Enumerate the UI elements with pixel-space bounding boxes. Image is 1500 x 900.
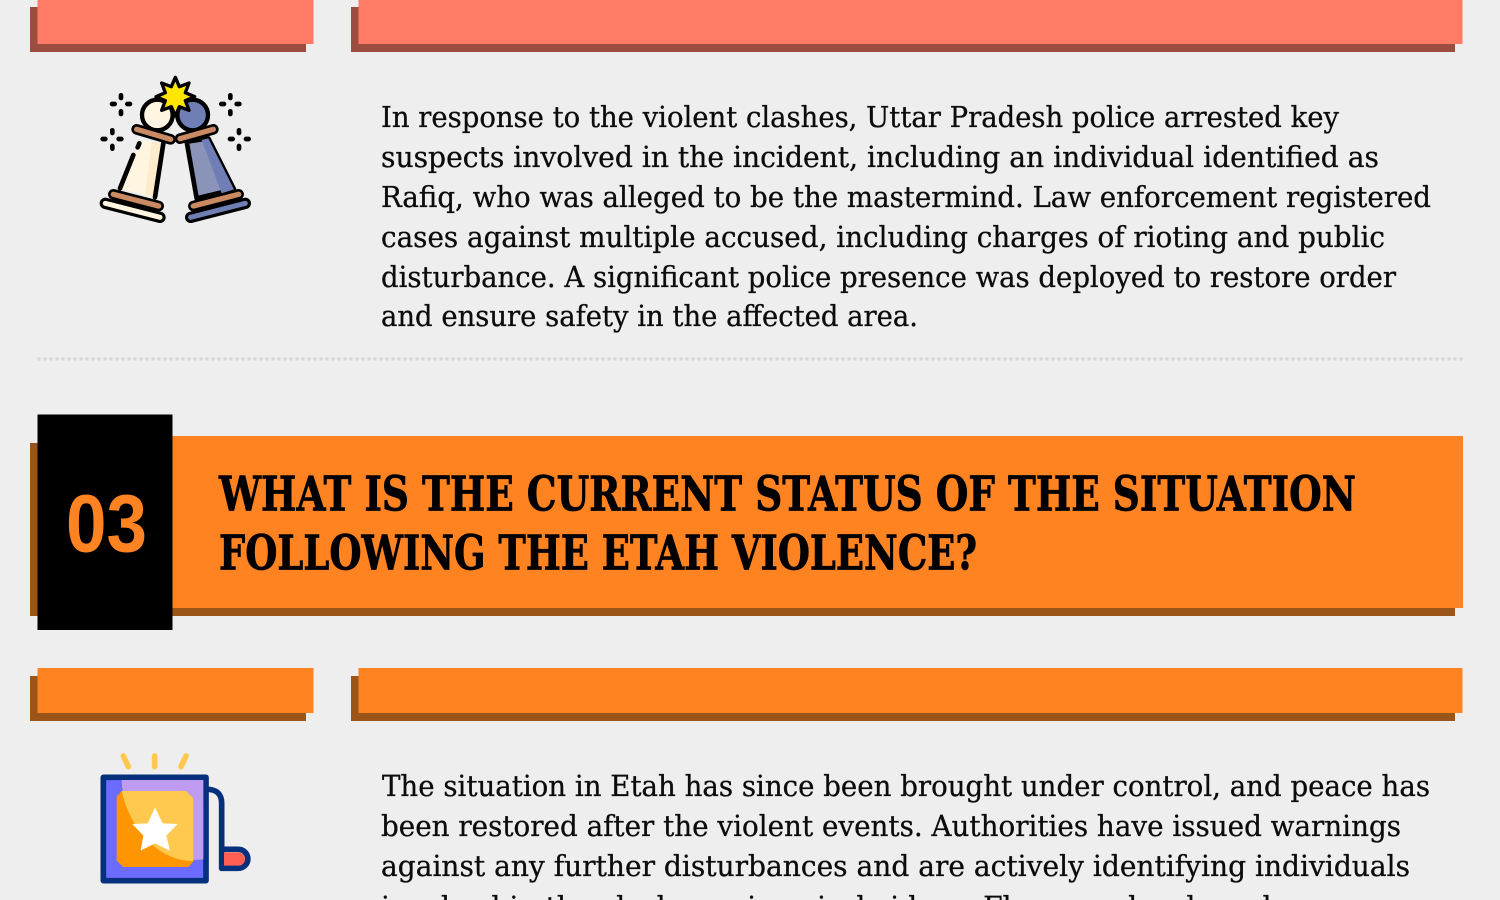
number badge: 03 (66, 478, 147, 570)
text block: police response: In response to the violent clashes, Uttar Pradesh police arrested key (381, 100, 1340, 134)
text block: police response: Rafiq, who was alleged to be the mastermind. Law enforcement registered (381, 180, 1431, 214)
text block: police response: disturbance. A significant police presence was deployed to restore order (381, 260, 1396, 294)
icon: clashing chess pawns (103, 77, 249, 217)
icon part: cream pawn (105, 100, 173, 217)
panel: section 03 right orange bar (351, 668, 1462, 721)
icon part: sparkles (103, 95, 249, 149)
panel: section 02 right coral bar (351, 0, 1462, 52)
text block: current status: The situation in Etah has since been brought under control, and peace has (382, 769, 1430, 803)
panel: section 02 left coral bar (30, 0, 314, 52)
icon part: star tile (117, 791, 193, 867)
panel: section 03 header (30, 414, 1463, 630)
icon part: light rays (123, 756, 186, 767)
heading: FOLLOWING THE ETAH VIOLENCE? (219, 526, 977, 582)
text block: current status (381, 769, 1430, 900)
text block: police response: suspects involved in the incident, including an individual identified as (381, 140, 1379, 174)
text block: current status: against any further disturbances and are actively identifying individuals (381, 849, 1410, 883)
text block: current status: been restored after the violent events. Authorities have issued warnings (381, 809, 1401, 843)
text block: police response (381, 100, 1431, 333)
icon part: blue pawn (177, 100, 245, 217)
icon part: impact star (156, 77, 195, 116)
icon part: box (103, 777, 206, 881)
number badge (38, 414, 172, 630)
icon: star box with crank (103, 756, 248, 881)
heading (218, 466, 1356, 582)
icon part: crank handle (207, 789, 248, 868)
text block: police response: cases against multiple accused, including charges of rioting and public (381, 220, 1385, 254)
text block: police response: and ensure safety in the affected area. (381, 299, 918, 333)
panel: section 03 left orange bar (30, 668, 314, 721)
